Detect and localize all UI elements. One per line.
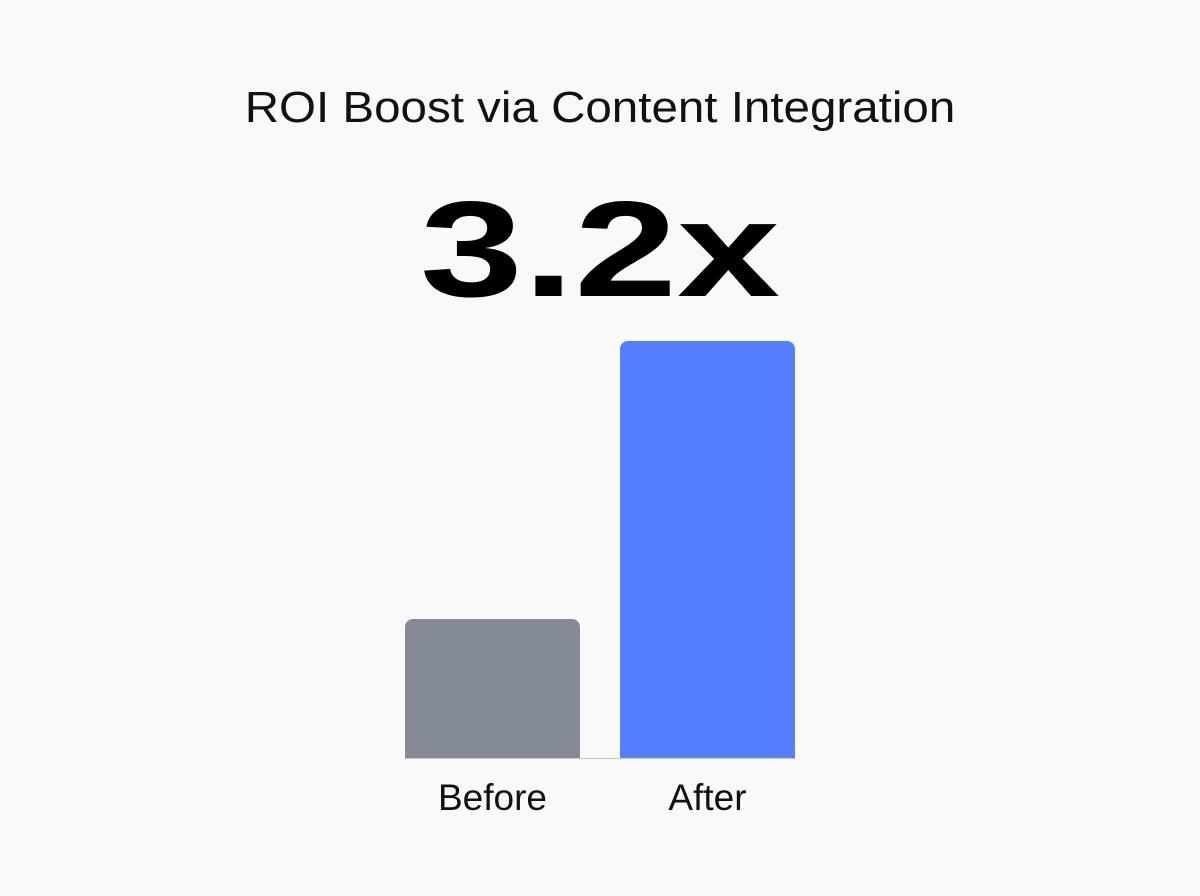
label: after: After [668, 777, 747, 818]
title: ROI Boost via Content Integration [245, 83, 955, 132]
bar: before [405, 619, 580, 758]
bar: after [620, 341, 795, 758]
big number: 3.2x [420, 173, 780, 325]
label: before: Before [438, 777, 547, 818]
bar chart [405, 341, 795, 818]
